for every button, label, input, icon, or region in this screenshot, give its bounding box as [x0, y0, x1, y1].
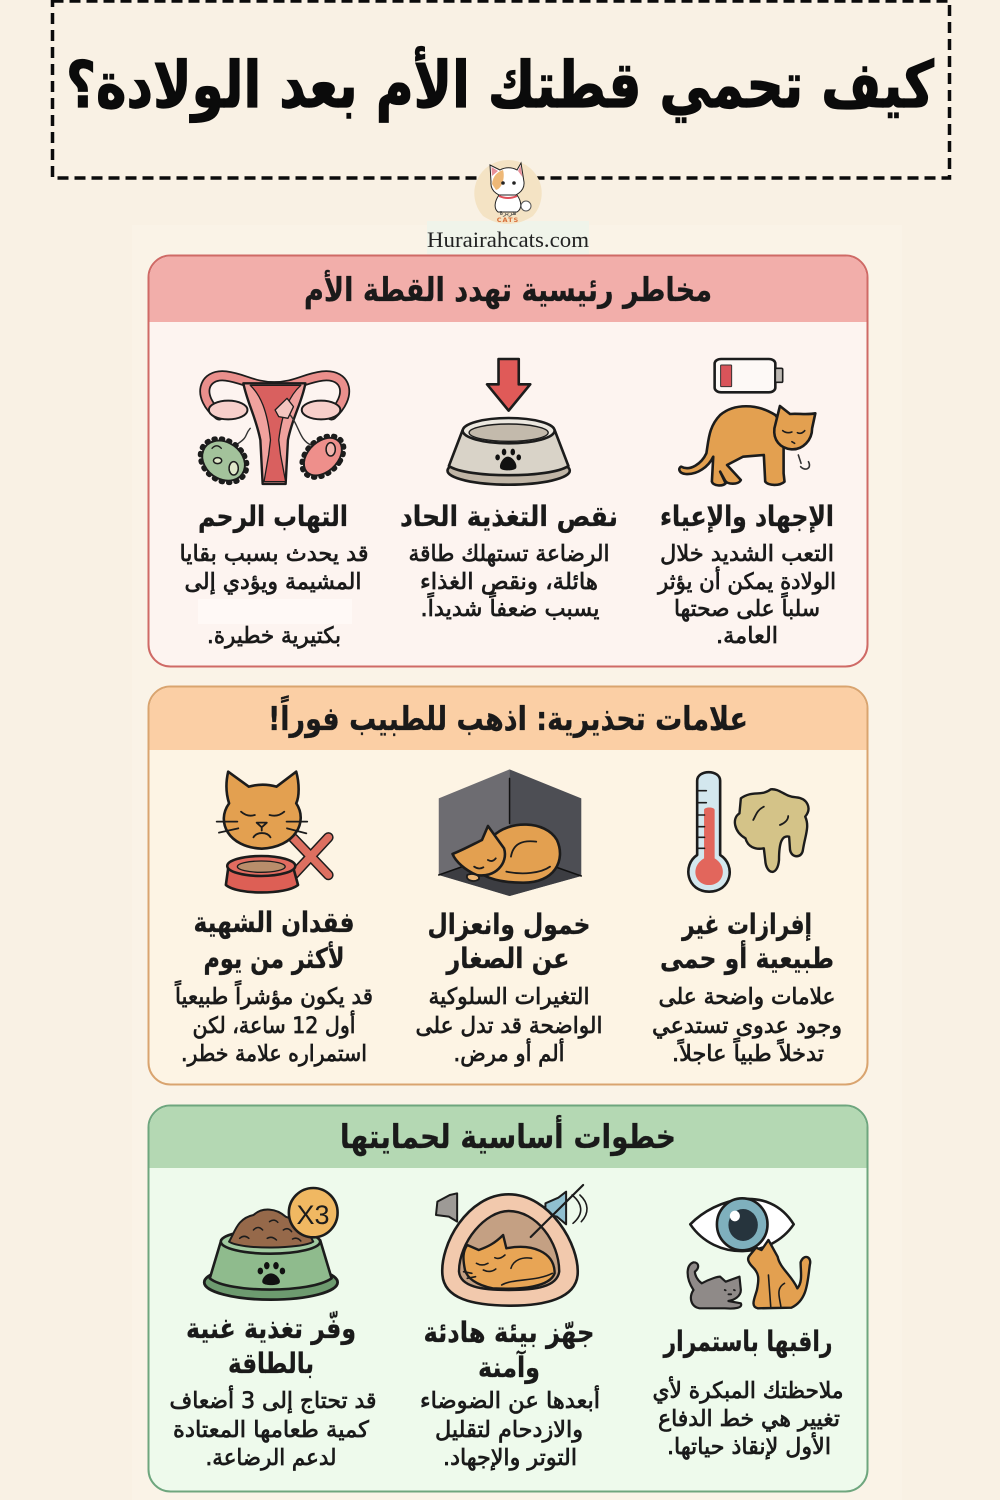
card body: يسبب ضعفاً شديداً.: [420, 592, 600, 622]
panel: warning signs: [148, 686, 868, 1084]
step card: monitor: [652, 1325, 844, 1460]
risks heading bar: [150, 256, 866, 322]
card body: قد تحتاج إلى 3 أضعاف: [170, 1385, 376, 1414]
card title: راقبها باستمرار: [662, 1325, 832, 1358]
icon: eye watching cats: [688, 1198, 810, 1309]
title box: [52, 1, 950, 178]
card body: هائلة، ونقص الغذاء: [420, 569, 598, 595]
card body: علامات واضحة على: [658, 984, 836, 1010]
risk card: metritis: [180, 500, 368, 649]
step card: rich nutrition: [170, 1310, 376, 1471]
card body: [420, 1385, 600, 1471]
card body: الأول لإنقاذ حياتها.: [667, 1432, 831, 1460]
logo mark text: هريرة: [499, 209, 517, 217]
card title: وفّر تغذية غنية: [186, 1310, 356, 1345]
logo cats text: CATS: [497, 216, 519, 224]
card body: ألم أو مرض.: [454, 1038, 564, 1067]
card body: العامة.: [716, 623, 778, 649]
card body: [416, 984, 602, 1067]
card title: التهاب الرحم: [198, 500, 348, 533]
website label: Hurairahcats.com: [427, 227, 589, 252]
steps heading bar: [150, 1106, 866, 1168]
card body: [180, 541, 368, 649]
card body: [652, 1376, 844, 1460]
card title: [194, 906, 354, 975]
card title: [186, 1310, 356, 1380]
panel: protection steps: [148, 1106, 868, 1492]
card title: [428, 908, 590, 975]
risks heading: مخاطر رئيسية تهدد القطة الأم: [304, 269, 712, 310]
card body: [170, 1385, 376, 1471]
card body: أبعدها عن الضوضاء: [420, 1385, 600, 1414]
card title: نقص التغذية الحاد: [400, 500, 618, 533]
steps heading: خطوات أساسية لحمايتها: [340, 1115, 676, 1157]
icon: cat refusing food: [217, 772, 328, 892]
card title: جهّز بيئة هادئة: [424, 1316, 594, 1349]
card title: [424, 1316, 594, 1384]
card body: الواضحة قد تدل على: [416, 1013, 602, 1039]
card body: [652, 984, 842, 1067]
warning card: discharge or fever: [652, 908, 842, 1067]
website label: [427, 221, 589, 261]
panel: risks: [148, 256, 868, 666]
warning card: lethargy: [416, 908, 602, 1067]
card title: عن الصغار: [445, 942, 570, 975]
card body: تغيير هي خط الدفاع: [658, 1406, 840, 1432]
card body: التوتر والإجهاد.: [443, 1445, 577, 1471]
card body: الولادة يمكن أن يؤثر: [657, 566, 836, 595]
card body: تدخلاً طبياً عاجلاً.: [672, 1037, 824, 1067]
card body: استمراره علامة خطر.: [181, 1041, 367, 1067]
card title: لأكثر من يوم: [204, 941, 344, 975]
card title: خمول وانعزال: [428, 908, 590, 941]
card body: والازدحام لتقليل: [435, 1417, 583, 1443]
card body: قد يكون مؤشراً طبيعياً: [175, 980, 373, 1010]
risk card: exhaustion: [657, 500, 836, 649]
icon: lethargic cat in dark corner: [439, 769, 581, 896]
badge text: X3: [296, 1200, 330, 1230]
card title: فقدان الشهية: [194, 906, 354, 939]
card body: الرضاعة تستهلك طاقة: [408, 541, 610, 567]
card body: سلباً على صحتها: [674, 592, 820, 622]
icon: food bowl with X3 badge: [204, 1188, 338, 1300]
card body: [657, 541, 836, 649]
card body: التعب الشديد خلال: [660, 541, 834, 567]
risk card: malnutrition: [400, 500, 618, 622]
icon: infected uterus with bacteria: [192, 376, 352, 487]
card body: [175, 980, 373, 1067]
card title: [660, 908, 834, 975]
logo: Hurairah cats: [474, 160, 542, 224]
card body: قد يحدث بسبب بقايا: [180, 541, 368, 567]
warning heading bar: [150, 688, 866, 750]
warning card: appetite loss: [175, 906, 373, 1067]
card body: التغيرات السلوكية: [428, 984, 590, 1010]
card body: المشيمة ويؤدي إلى: [184, 569, 362, 595]
card body: وجود عدوى تستدعي: [652, 1013, 842, 1039]
card body: أول 12 ساعة، لكن: [193, 1010, 356, 1039]
icon: empty bowl with down arrow: [447, 359, 570, 485]
warning heading: علامات تحذيرية: اذهب للطبيب فوراً!: [268, 695, 748, 739]
card body: [408, 541, 610, 622]
step card: calm environment: [420, 1316, 600, 1471]
card body: لدعم الرضاعة.: [206, 1445, 336, 1471]
icon: quiet cat bed: [436, 1185, 587, 1306]
card title: بالطاقة: [228, 1347, 314, 1380]
card body: كمية طعامها المعتادة: [173, 1417, 369, 1443]
card title: طبيعية أو حمى: [660, 940, 834, 975]
card body: بكتيرية خطيرة.: [207, 623, 341, 649]
card title: الإجهاد والإعياء: [660, 500, 834, 533]
card title: وآمنة: [478, 1350, 540, 1384]
card body: ملاحظتك المبكرة لأي: [652, 1376, 844, 1404]
card title: إفرازات غير: [680, 908, 812, 942]
icon: exhausted cat with low battery: [679, 359, 815, 485]
icon: thermometer and discharge: [688, 772, 808, 892]
